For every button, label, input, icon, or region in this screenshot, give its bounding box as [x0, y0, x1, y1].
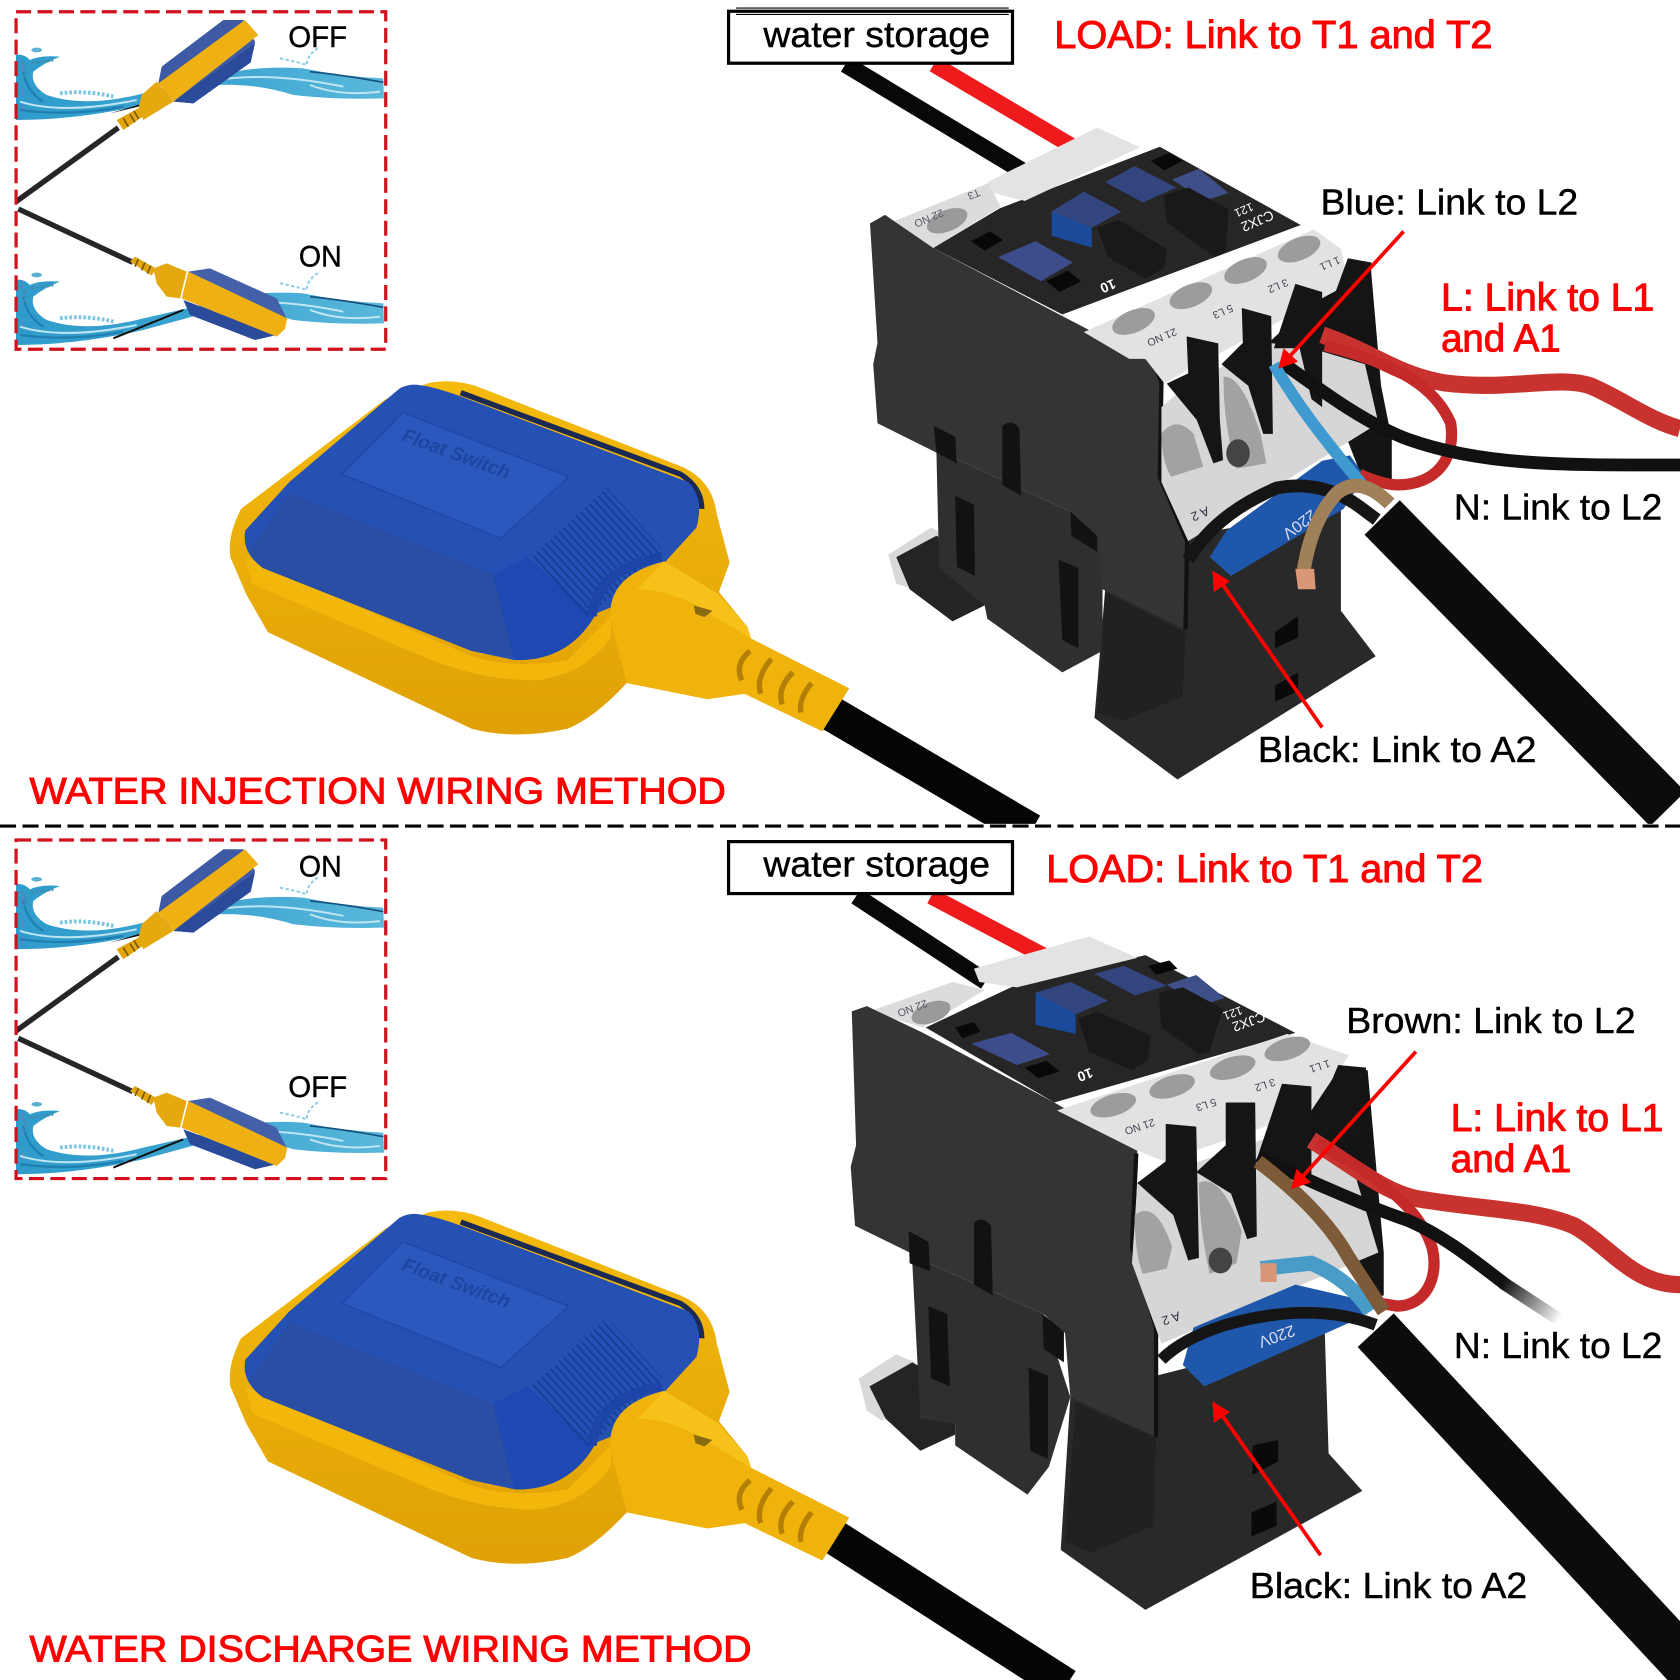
heading: load: LOAD: Link to T1 and T2: [1054, 14, 1492, 57]
panel: water discharge wiring method: [16, 840, 1680, 1680]
blue buttons: [1036, 982, 1108, 1034]
base: [1094, 509, 1376, 779]
label: OFF: OFF: [288, 1071, 347, 1104]
top block: [926, 955, 1295, 1102]
contactor with wiring: 3 L2: [1266, 276, 1290, 295]
embossed float switch text: Float Switch: [399, 425, 513, 484]
foot: [859, 1354, 915, 1421]
right black column: [1269, 262, 1392, 482]
fins: [1167, 258, 1371, 463]
contactor with wiring: 220V: [1279, 506, 1320, 543]
auxiliary plate: [888, 183, 1001, 248]
contactor with wiring: 10: [1075, 1065, 1095, 1085]
icon: float positions over water: [16, 20, 384, 345]
heading: load: LOAD: Link to T1 and T2: [1046, 848, 1483, 891]
panel: water injection wiring method: [16, 8, 1680, 831]
lower left body: [912, 1263, 1070, 1495]
contactor with wiring: 1 L1: [1318, 253, 1342, 273]
sheath cable: [1376, 1330, 1680, 1676]
label: black: Black: Link to A2: [1258, 729, 1536, 770]
terminal strip: [1057, 1034, 1349, 1161]
load wires: [1311, 1140, 1680, 1285]
contactor with wiring: 220V: [1256, 1321, 1297, 1351]
contactor with wiring: 21 NO: [1145, 325, 1178, 348]
foot: [888, 528, 947, 589]
contactor with wiring: T3: [966, 186, 982, 202]
contactor with wiring: 22 NO: [896, 997, 929, 1019]
arrow: black wire: [1212, 1401, 1321, 1555]
label: L: L: Link to L1: [1441, 277, 1654, 320]
water storage wires and box: water storage: [762, 843, 990, 884]
label: N: N: Link to L2: [1454, 487, 1662, 528]
contactor with wiring: 3 L2: [1253, 1076, 1277, 1093]
fins: [1137, 1065, 1366, 1261]
arrow: black wire: [1212, 571, 1322, 728]
coil: [1183, 1285, 1365, 1386]
terminal lower section: [1132, 1132, 1378, 1344]
black conductor: [1161, 1313, 1376, 1360]
label: and A1: and A1: [1441, 317, 1561, 360]
terminal lower section: [1161, 343, 1378, 541]
icon: float positions over water: [16, 849, 384, 1174]
contactor with wiring: 1 L1: [1308, 1057, 1331, 1075]
terminal strip: [1084, 229, 1349, 383]
contactor with wiring: A 2: [1160, 1309, 1182, 1329]
label: N: N: Link to L2: [1454, 1325, 1662, 1366]
arrow: blue wire: [1278, 231, 1404, 369]
right black column: [1258, 1068, 1384, 1301]
inset: float switch OFF and ON positions: [16, 12, 386, 349]
contactor with wiring: 22 NO: [912, 206, 945, 229]
top block: [933, 147, 1301, 314]
label: L: L: Link to L1: [1451, 1097, 1663, 1140]
contactor with wiring: 121: [1221, 1003, 1244, 1022]
contactor with wiring: 21 NO: [1123, 1116, 1156, 1137]
label: and A1: and A1: [1451, 1138, 1571, 1181]
left face: [870, 215, 1187, 629]
dashed frame: [16, 12, 386, 349]
contactor with wiring: [851, 936, 1680, 1676]
contactor with wiring: [870, 128, 1680, 809]
water storage wires and box: [729, 842, 1050, 981]
arrow: brown wire: [1291, 1052, 1416, 1189]
left face: [851, 1006, 1156, 1437]
label: blue: Blue: Link to L2: [1321, 181, 1578, 222]
label: brown: Brown: Link to L2: [1346, 1000, 1636, 1041]
dashed frame: [16, 840, 386, 1179]
embossed float switch text: Float Switch: [399, 1255, 513, 1313]
coil: [1210, 455, 1365, 576]
contactor with wiring: 121: [1232, 200, 1255, 219]
label: ON: ON: [299, 240, 342, 273]
contactor with wiring: 10: [1098, 276, 1118, 297]
heading: water discharge: WATER DISCHARGE WIRING METHOD: [29, 1627, 752, 1669]
label: ON: ON: [299, 850, 342, 883]
blue buttons: [1052, 192, 1121, 248]
icon: float switch with cable: [230, 1211, 1066, 1680]
water storage wires and box: [729, 8, 1077, 171]
label: black: Black: Link to A2: [1250, 1565, 1527, 1606]
heading: water injection: WATER INJECTION WIRING METHOD: [29, 770, 726, 812]
contactor with wiring: CJX2: [1230, 1009, 1268, 1035]
dashed section divider: [0, 823, 1680, 829]
label: OFF: OFF: [288, 21, 347, 54]
contactor with wiring: CJX2: [1239, 207, 1276, 235]
contactor with wiring: 5 L3: [1211, 302, 1235, 321]
contactor with wiring: A 2: [1189, 503, 1212, 525]
brown conductor: [1303, 486, 1390, 572]
sheath cable: [1382, 518, 1668, 809]
black conductor: [1188, 486, 1377, 560]
icon: float switch with cable: [230, 381, 1031, 831]
load wires: [1322, 335, 1680, 429]
contactor with wiring: 5 L3: [1194, 1095, 1218, 1113]
inset: float switch ON and OFF positions: [16, 840, 386, 1179]
lower left body: [936, 453, 1102, 672]
base: [1061, 1333, 1362, 1610]
brown conductor: [1258, 1161, 1384, 1311]
auxiliary plate: [869, 982, 985, 1028]
water storage wires and box: water storage: [762, 14, 990, 55]
